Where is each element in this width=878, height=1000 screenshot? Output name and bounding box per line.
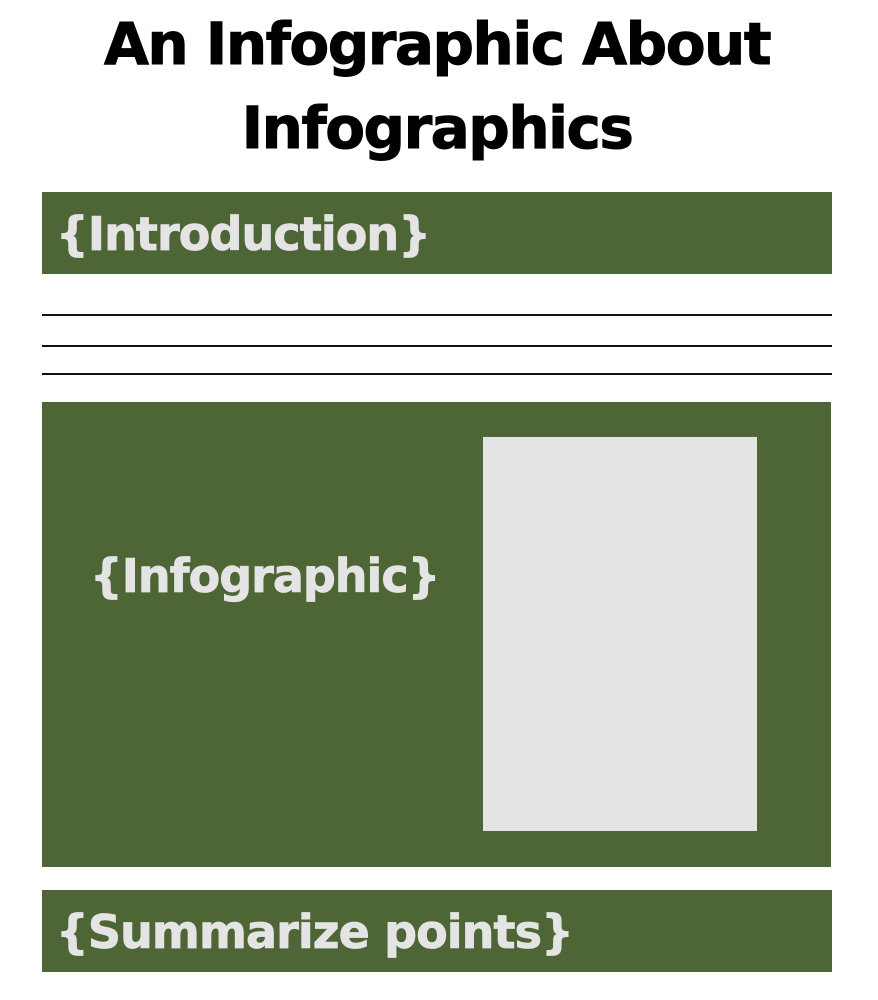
heading: introduction: {Introduction} [56,207,430,261]
title [104,10,771,162]
heading: summarize points: {Summarize points} [56,905,573,959]
panel: introduction banner [42,192,832,274]
panel: infographic [42,402,831,867]
title: An Infographic About [104,10,770,78]
title: Infographics [242,94,632,162]
heading: infographic: {Infographic} [90,549,439,603]
panel: summary banner [42,890,832,972]
infographic placeholder [483,437,757,831]
